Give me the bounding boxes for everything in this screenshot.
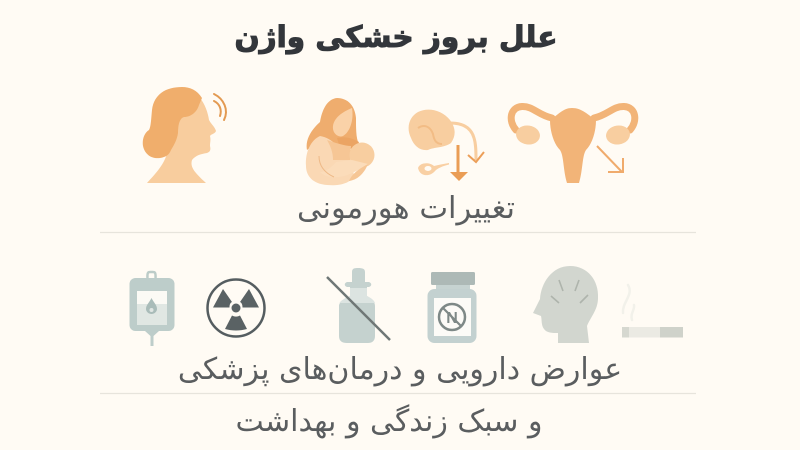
icon: IV bag <box>130 272 174 346</box>
icon: cigarette with smoke <box>622 285 683 338</box>
heading: medication and medical treatment side effects: عوارض دارویی و درمان‌های پزشکی <box>178 352 622 387</box>
icon: crossed-out dropper bottle <box>327 268 390 343</box>
icon: supplement jar: N <box>446 310 458 327</box>
icon: supplement jar <box>428 272 476 343</box>
icon: head with stress lines <box>533 266 598 343</box>
icon: woman head profile <box>143 87 226 183</box>
icon: uterus with downward arrow <box>511 106 635 183</box>
icon: ovary and falling hormone arrows <box>409 110 484 181</box>
icon: breastfeeding mother <box>306 98 374 185</box>
heading: hormonal changes: تغییرات هورمونی <box>297 191 515 226</box>
heading: lifestyle and hygiene: و سبک زندگی و بهداشت <box>236 404 542 439</box>
icon: radiation symbol <box>208 280 264 336</box>
title: علل بروز خشکی واژن <box>235 20 557 54</box>
